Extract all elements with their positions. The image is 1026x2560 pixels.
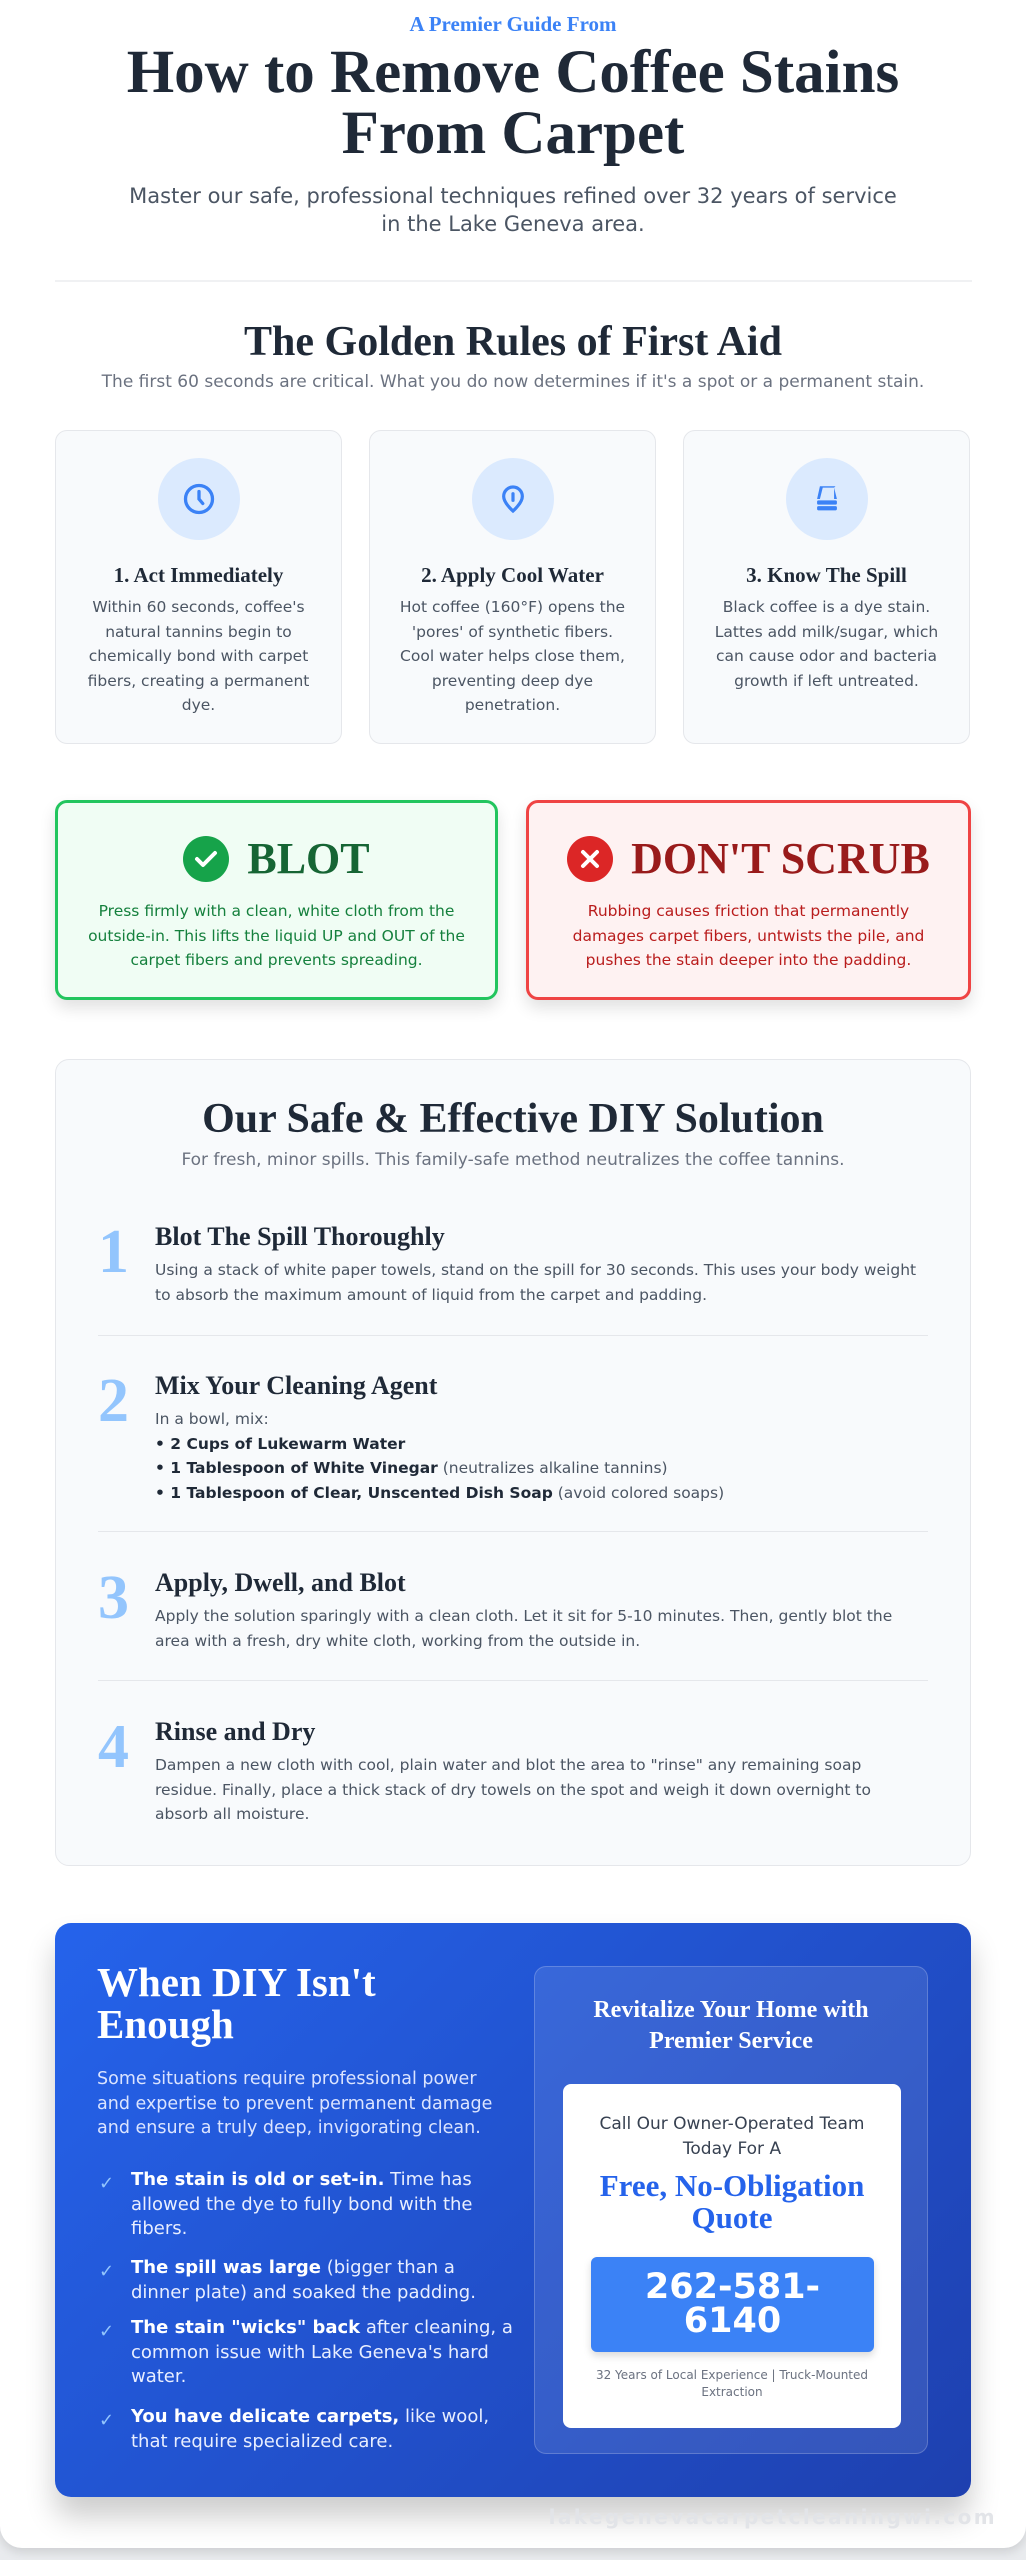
- card: act immediately: Within 60 seconds, coffee's natural tannins begin to chemically bond with carpet fibers, creating a permanent dye.: [88, 598, 309, 714]
- card: apply cool water: [369, 430, 656, 744]
- golden rules subtitle: The first 60 seconds are critical. What you do now determines if it's a spot or a permanent stain.: [102, 372, 924, 392]
- step 1: Using a stack of white paper towels, stand on the spill for 30 seconds. This uses your body weight to absorb the maximum amount of liquid from the carpet and padding.: [155, 1261, 916, 1304]
- subtitle: [129, 184, 897, 236]
- panel: CTA: [55, 1923, 971, 2497]
- step 3: 3: [98, 1564, 129, 1632]
- heading: DIY solution: Our Safe & Effective DIY Solution: [202, 1096, 824, 1142]
- panel: don't scrub: [526, 800, 971, 1000]
- CTA right box: [534, 1966, 928, 2454]
- card: know the spill: [683, 430, 970, 744]
- icon: coffee machine: [786, 458, 868, 540]
- checklist: The stain "wicks" back after cleaning, a common issue with Lake Geneva's hard water.: [131, 2317, 513, 2387]
- step 4: Dampen a new cloth with cool, plain water and blot the area to "rinse" any remaining soap residue. Finally, place a thick stack of dry towels on the spot and weigh it down overnight to absorb all moisture.: [155, 1756, 871, 1823]
- DIY subtitle: For fresh, minor spills. This family-safe method neutralizes the coffee tannins.: [181, 1150, 845, 1170]
- icon: clock: [158, 458, 240, 540]
- box heading: Revitalize Your Home with: [593, 1997, 869, 2023]
- icon: water drop: [472, 458, 554, 540]
- card: apply cool water: Hot coffee (160°F) opens the 'pores' of synthetic fibers. Cool water helps close them, preventing deep dye penetration.: [400, 598, 625, 714]
- title: How to Remove Coffee Stains: [127, 39, 899, 106]
- step 1: 1: [98, 1218, 129, 1286]
- card: apply cool water: 2. Apply Cool Water: [421, 563, 604, 587]
- white quote card: Call Our Owner-Operated Team: [599, 2114, 864, 2134]
- step 3: Apply, Dwell, and Blot: [155, 1568, 406, 1597]
- phone button: [591, 2257, 874, 2352]
- heading: golden rules: The Golden Rules of First Aid: [244, 319, 782, 365]
- title: [127, 39, 899, 167]
- checklist: ✓: [99, 2173, 114, 2194]
- step 3: [98, 1564, 892, 1650]
- phone button: 6140: [684, 2301, 781, 2341]
- blot heading with check icon: [183, 834, 370, 883]
- checklist: You have delicate carpets, like wool, that require specialized care.: [131, 2406, 489, 2452]
- box heading: Premier Service: [649, 2028, 813, 2054]
- step 2: 2: [98, 1367, 129, 1435]
- step 2: • 1 Tablespoon of White Vinegar (neutralizes alkaline tannins): [155, 1459, 668, 1477]
- step 2: Mix Your Cleaning Agent: [155, 1371, 437, 1400]
- don't scrub heading with x icon: DON'T SCRUB: [631, 834, 930, 883]
- CTA heading: When DIY Isn't: [97, 1959, 376, 2005]
- card: act immediately: [55, 430, 342, 744]
- CTA paragraph: Some situations require professional power and expertise to prevent permanent damage and ensure a truly deep, invigorating clean.: [97, 2069, 492, 2138]
- card: act immediately: 1. Act Immediately: [114, 563, 283, 587]
- checklist: The spill was large (bigger than a dinner plate) and soaked the padding.: [131, 2257, 476, 2302]
- checklist: The stain is old or set-in. Time has allowed the dye to fully bond with the fibers.: [131, 2169, 472, 2239]
- step 4: [98, 1713, 871, 1823]
- title: From Carpet: [342, 100, 684, 167]
- step 1: Blot The Spill Thoroughly: [155, 1222, 445, 1251]
- step 2: [98, 1367, 724, 1502]
- blot heading with check icon: BLOT: [247, 834, 370, 883]
- step 2: In a bowl, mix:: [155, 1410, 269, 1428]
- phone button: 262-581-: [645, 2267, 820, 2307]
- eyebrow: A Premier Guide From: A Premier Guide From: [409, 12, 617, 36]
- step 4: Rinse and Dry: [155, 1717, 315, 1746]
- panel: DIY solution: [55, 1059, 971, 1866]
- panel: don't scrub: Rubbing causes friction that permanently damages carpet fibers, untwists the pile, and pushes the stain deeper into the padding.: [573, 902, 924, 969]
- footer watermark: lakegenevacarpetcleaningwi.com: [549, 2505, 997, 2529]
- card: know the spill: Black coffee is a dye stain. Lattes add milk/sugar, which can cause odor and bacteria growth if left untreated.: [715, 598, 938, 690]
- white quote card: [563, 2084, 901, 2428]
- step 2: • 2 Cups of Lukewarm Water: [155, 1434, 405, 1452]
- subtitle: in the Lake Geneva area.: [381, 212, 645, 236]
- white quote card: 32 Years of Local Experience | Truck-Mounted Extraction: [596, 2368, 868, 2399]
- step 1: [98, 1218, 916, 1304]
- step 4: 4: [98, 1713, 129, 1781]
- white quote card: Today For A: [683, 2138, 781, 2158]
- white quote card: Quote: [692, 2200, 772, 2235]
- step 2: • 1 Tablespoon of Clear, Unscented Dish Soap (avoid colored soaps): [155, 1484, 724, 1502]
- CTA heading: [97, 1959, 376, 2047]
- checklist: ✓: [99, 2410, 114, 2431]
- card: know the spill: 3. Know The Spill: [746, 563, 907, 587]
- panel: blot: [55, 800, 498, 1000]
- checklist: ✓: [99, 2321, 114, 2342]
- panel: blot: Press firmly with a clean, white cloth from the outside-in. This lifts the liquid UP and OUT of the carpet fibers and prevents spreading.: [88, 902, 465, 969]
- checklist: [99, 2169, 513, 2452]
- CTA heading: Enough: [97, 2001, 234, 2047]
- step 3: Apply the solution sparingly with a clean cloth. Let it sit for 5-10 minutes. Then, gently blot the area with a fresh, dry white cloth, working from the outside in.: [155, 1607, 892, 1650]
- box heading: [593, 1997, 869, 2054]
- white quote card: Free, No-Obligation: [600, 2168, 864, 2203]
- checklist: ✓: [99, 2261, 114, 2282]
- subtitle: Master our safe, professional techniques refined over 32 years of service: [129, 184, 897, 208]
